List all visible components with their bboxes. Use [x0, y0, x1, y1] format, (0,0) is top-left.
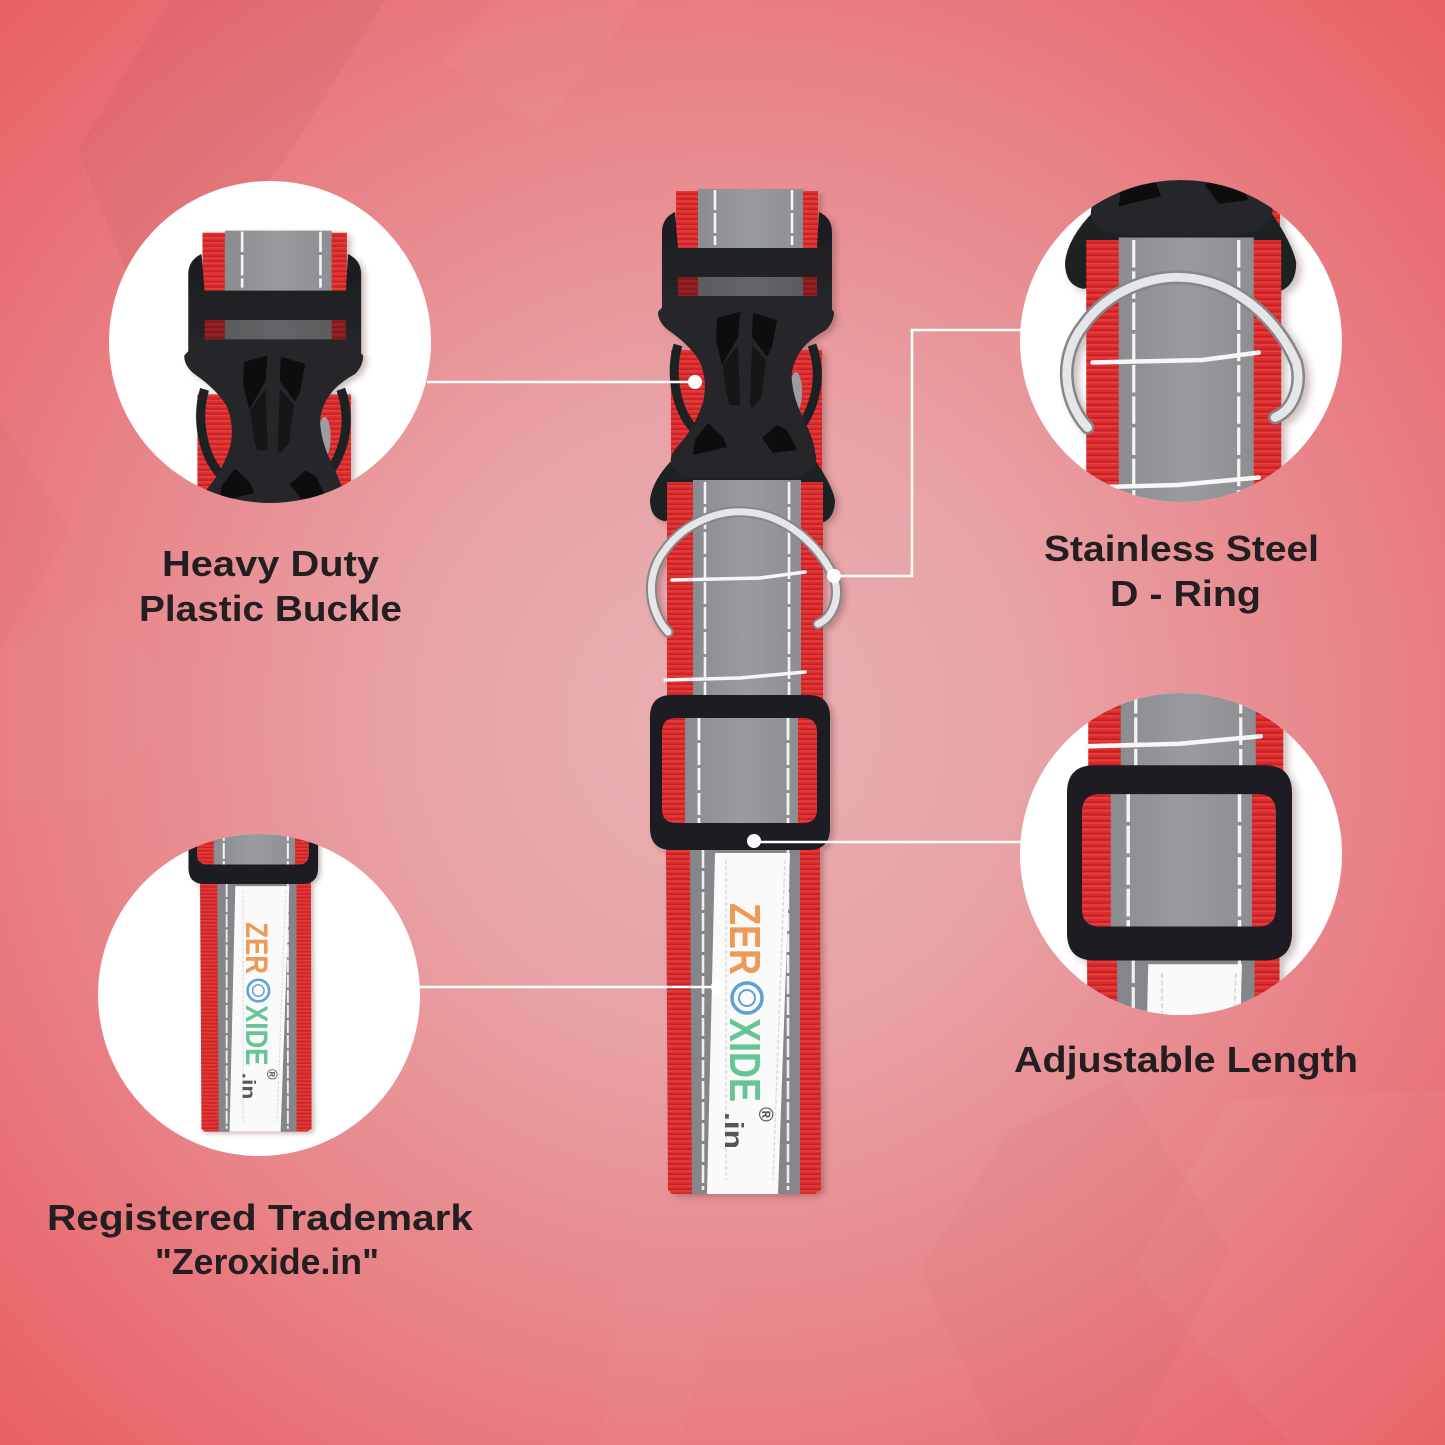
label: registered trademark — [47, 1197, 474, 1282]
label: stainless steel d-ring: Stainless Steel — [1044, 528, 1319, 569]
label: registered trademark: Registered Trademark — [47, 1197, 474, 1238]
buckle: side prongs — [674, 345, 817, 428]
logo text: .in: .in — [719, 1112, 749, 1149]
connector: d-ring — [827, 330, 1021, 583]
label: heavy duty plastic buckle: Plastic Buckle — [139, 588, 402, 629]
logo mark: registered: ® — [754, 1107, 776, 1122]
buckle: lower ears — [650, 458, 835, 523]
strap: behind buckle — [671, 350, 822, 485]
label: heavy duty plastic buckle — [139, 543, 402, 629]
logo text: zer: ZER — [720, 903, 769, 975]
label: stainless steel d-ring — [1044, 528, 1319, 614]
d-ring — [651, 512, 836, 632]
connector: buckle — [427, 375, 702, 389]
strap: top section — [676, 189, 818, 306]
connector: trademark — [420, 980, 725, 994]
label: heavy duty plastic buckle: Heavy Duty — [162, 543, 379, 584]
panel: trademark circle: .in — [238, 1073, 259, 1099]
logo text: xide: XIDE — [720, 1018, 769, 1102]
buckle: upper frame — [662, 212, 832, 310]
label: adjustable length: Adjustable Length — [1014, 1039, 1358, 1080]
product: main collar — [650, 189, 836, 1194]
strap: lower section — [666, 845, 821, 1194]
label: stainless steel d-ring: D - Ring — [1110, 573, 1261, 614]
panel: trademark circle: XIDE — [239, 1005, 275, 1065]
buckle: reflective gap — [790, 372, 802, 412]
logo: zeroxide label on main collar — [719, 903, 776, 1149]
panel: trademark circle: ® — [263, 1069, 279, 1080]
panel: slider circle — [1020, 693, 1342, 1015]
panel: trademark circle — [98, 834, 420, 1156]
panel: d-ring circle — [1020, 180, 1342, 502]
slider: frame — [650, 695, 830, 850]
buckle: main body — [658, 301, 834, 478]
panel: trademark circle: ZER — [239, 922, 275, 974]
stitching: cross stitches — [665, 572, 805, 680]
connector: slider — [747, 834, 1021, 848]
strap: middle section — [667, 480, 823, 707]
panel: buckle circle — [109, 181, 431, 503]
logo icon: ring — [732, 983, 762, 1013]
label: registered trademark: "Zeroxide.in" — [155, 1241, 379, 1282]
slider: strap window — [662, 716, 817, 826]
